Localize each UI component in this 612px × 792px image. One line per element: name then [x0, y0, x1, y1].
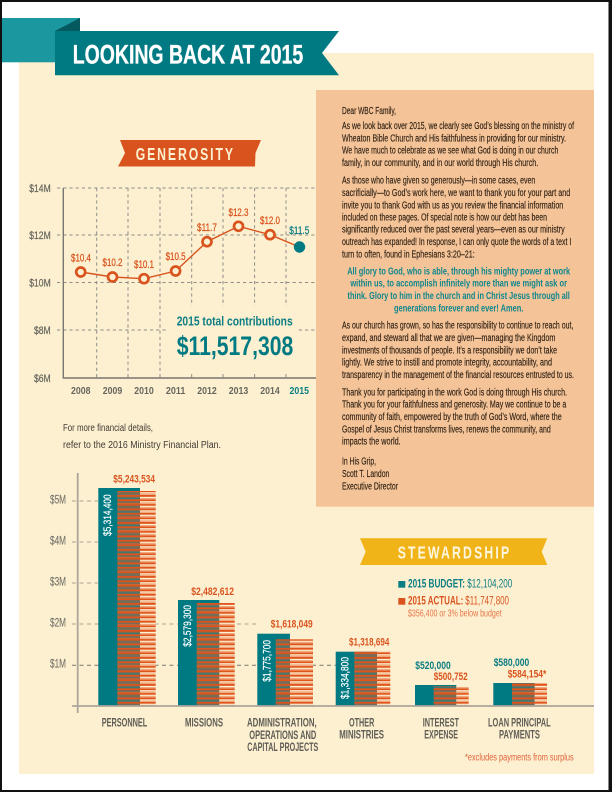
bar group: missions: $2,579,300 [182, 605, 194, 647]
category labels: EXPENSE [424, 730, 458, 742]
x axis year labels [71, 385, 309, 397]
category labels: OPERATIONS AND [249, 730, 316, 742]
category labels: OTHER [349, 718, 375, 730]
category labels: ADMINISTRATION, [247, 718, 317, 730]
legend swatch: actual [398, 598, 405, 605]
data value labels: $11.5 [289, 225, 309, 237]
banner fold shadow [55, 18, 80, 31]
x axis year labels: 2009 [103, 385, 122, 397]
y axis labels: $12M [29, 230, 51, 242]
data value labels: $11.7 [197, 222, 217, 234]
letter paragraph 3 [342, 321, 574, 381]
x axis year labels: 2008 [71, 385, 91, 397]
data value labels: $10.5 [166, 251, 186, 263]
category labels: PAYMENTS [499, 730, 540, 742]
x axis year labels: 2015 [290, 385, 309, 397]
data value labels: $10.1 [134, 259, 154, 271]
bar group: other ministries: $1,334,800 [340, 657, 352, 699]
bar group: loan principal: $584,154* [508, 668, 547, 680]
data value labels: $12.0 [260, 215, 280, 227]
letter paragraph 1: family, in our community, and in our world through His church. [342, 158, 538, 169]
bar chart y labels: $4M [50, 533, 66, 547]
legend: budget: 2015 BUDGET: [408, 579, 465, 591]
callout backdrop [168, 306, 298, 373]
financial details note [63, 423, 221, 451]
stewardship ribbon heading: STEWARDSHIP [398, 543, 511, 563]
bar group: personnel: $5,314,400 [102, 494, 114, 536]
bar group: interest expense [415, 660, 469, 706]
x axis year labels: 2014 [260, 385, 280, 397]
bar group: personnel: $5,243,534 [113, 474, 156, 486]
bar chart axes [72, 473, 594, 713]
legend: variance note: $356,400 or 3% below budget [408, 608, 502, 619]
panel: letter [316, 90, 594, 507]
legend swatch: budget [398, 581, 405, 588]
legend: actual: 2015 ACTUAL: [408, 596, 463, 608]
bar group: other ministries [336, 637, 390, 706]
bar group: loan principal: $580,000 [494, 657, 529, 669]
letter signature: In His Grip, [342, 457, 376, 468]
bar chart y labels: $2M [50, 616, 66, 630]
bar group: missions [178, 586, 235, 706]
letter paragraph 2 [342, 176, 571, 260]
category labels: CAPITAL PROJECTS [247, 742, 319, 754]
x axis year labels: 2011 [166, 385, 185, 397]
stewardship ribbon heading [360, 538, 547, 565]
bar group: interest expense: $500,752 [434, 671, 468, 683]
chart axes [63, 188, 316, 378]
category labels: LOAN PRINCIPAL [488, 718, 551, 730]
bar chart y labels: $3M [50, 574, 66, 588]
category labels [102, 718, 551, 754]
data value labels: $12.3 [228, 207, 248, 219]
banner back fold [2, 18, 80, 62]
bar group: administration [257, 619, 313, 706]
bar group: other ministries: $1,318,694 [349, 637, 390, 649]
category labels: PERSONNEL [102, 718, 147, 730]
total contributions callout: 2015 total contributions [177, 313, 293, 328]
financial details note: refer to the 2016 Ministry Financial Plan. [63, 440, 221, 451]
footnote: *excludes payments from surplus [465, 753, 574, 764]
generosity ribbon heading: GENEROSITY [136, 145, 235, 165]
total contributions callout: $11,517,308 [177, 331, 293, 361]
letter paragraph 2: turn to often, found in Ephesians 3:20–21: [342, 249, 475, 260]
bar chart: stewardship [50, 473, 594, 764]
scripture quote [347, 266, 571, 315]
x axis year labels: 2010 [134, 385, 154, 397]
x axis year labels: 2013 [229, 385, 248, 397]
letter paragraph 1 [342, 121, 574, 169]
data value labels: $10.4 [71, 253, 91, 265]
chart grid [57, 188, 316, 378]
y axis labels: $6M [34, 373, 51, 385]
letter paragraph 4: impacts the world. [342, 436, 401, 447]
title: LOOKING BACK AT 2015 [73, 39, 303, 69]
letter greeting: Dear WBC Family, [342, 106, 396, 117]
bar group: loan principal [493, 657, 547, 706]
letter paragraph 4 [342, 387, 567, 447]
category labels: MISSIONS [185, 718, 223, 730]
data value labels [71, 207, 309, 271]
y axis labels [29, 183, 51, 385]
data value labels: $10.2 [102, 257, 122, 269]
line chart: generosity [29, 183, 316, 397]
scripture quote: generations forever and ever! Amen. [394, 304, 524, 315]
bar chart y labels: $5M [50, 492, 66, 506]
bar chart gridlines [72, 501, 336, 665]
x axis year labels: 2012 [197, 385, 217, 397]
letter signature: Executive Director [342, 481, 399, 492]
y axis labels: $10M [29, 277, 51, 289]
stewardship legend [398, 579, 512, 619]
letter signature [342, 457, 399, 492]
bar group: personnel [98, 474, 156, 706]
banner ribbon [55, 31, 339, 75]
title banner [2, 18, 339, 75]
legend: actual: $11,747,800 [465, 596, 509, 608]
bar chart y labels: $1M [50, 657, 66, 671]
bar group: interest expense: $520,000 [415, 660, 451, 672]
letter background [316, 90, 594, 507]
bar chart y labels [50, 492, 66, 671]
letter signature: Scott T. Landon [342, 469, 389, 480]
category labels: INTEREST [423, 718, 459, 730]
y axis labels: $8M [34, 325, 51, 337]
total contributions callout [177, 313, 293, 361]
data line [81, 226, 300, 279]
category labels: MINISTRIES [339, 730, 384, 742]
bar group: administration: $1,775,700 [261, 640, 273, 682]
2015 marker [294, 241, 305, 253]
bar group: administration: $1,618,049 [271, 619, 313, 631]
generosity ribbon heading [118, 140, 261, 166]
financial details note: For more financial details, [63, 423, 153, 434]
bar group: missions: $2,482,612 [191, 586, 234, 598]
data markers [76, 222, 274, 283]
y axis labels: $14M [29, 183, 51, 195]
letter paragraph 2: As those who have given so generously—in some cases, even [342, 176, 535, 187]
legend: budget: $12,104,200 [467, 579, 512, 591]
